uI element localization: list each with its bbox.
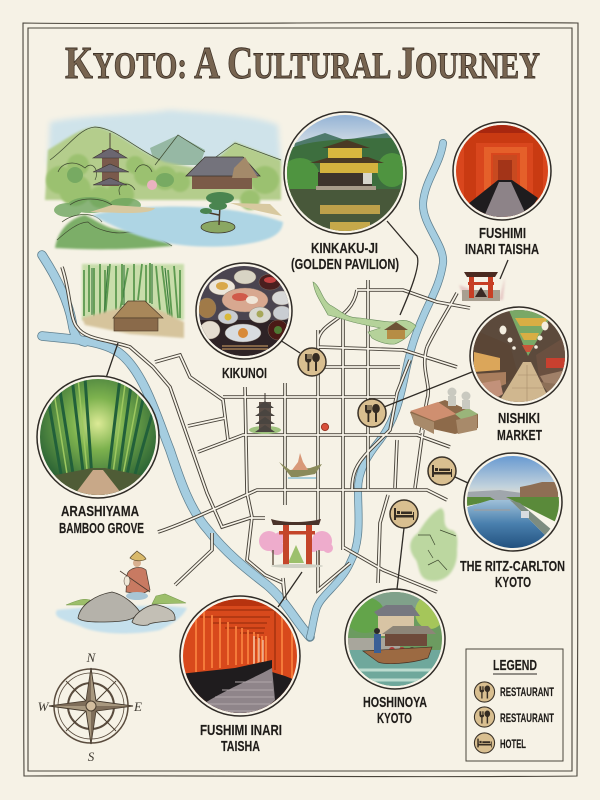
label: Fushimi Inari Taisha top: INARI TAISHA	[465, 241, 539, 258]
label: Arashiyama Bamboo Grove	[59, 503, 144, 537]
street grid	[62, 267, 470, 600]
label: Hoshinoya Kyoto: KYOTO	[377, 710, 412, 727]
legend row: hotel: HOTEL	[500, 737, 526, 751]
east river	[310, 143, 443, 637]
label: Kinkaku-ji: KINKAKU-JI	[311, 240, 378, 257]
compass rose	[38, 650, 142, 764]
label: Hoshinoya Kyoto	[363, 694, 427, 727]
marker: red city centre dot	[321, 423, 329, 431]
title: KYOTO: A CULTURAL JOURNEY	[65, 37, 540, 88]
legend heading: LEGEND	[493, 657, 537, 674]
west river	[42, 255, 310, 637]
legend panel	[466, 649, 563, 761]
legend row: restaurant: RESTAURANT	[500, 685, 554, 699]
label: Hoshinoya Kyoto: HOSHINOYA	[363, 694, 427, 711]
compass rose: S	[88, 749, 95, 764]
icon: small torii gate	[459, 272, 505, 301]
photo circle: Kikunoi	[196, 263, 292, 360]
photo circle: Hoshinoya Kyoto	[345, 589, 445, 690]
photo circle: The Ritz-Carlton Kyoto	[464, 453, 562, 552]
icon: torii gate with cherry blossoms	[259, 519, 333, 568]
icon: green hills	[410, 508, 457, 581]
illustration: bamboo grove and thatched hut	[82, 263, 184, 338]
label: Nishiki Market	[497, 410, 542, 444]
photo circle: Nishiki Market	[470, 307, 568, 405]
illustration: market stalls	[410, 388, 478, 434]
label: Fushimi Inari Taisha bottom	[200, 722, 282, 755]
label: Kinkaku-ji: (GOLDEN PAVILION)	[291, 256, 399, 273]
label: Nishiki Market: MARKET	[497, 427, 542, 444]
marker: hotel near Hoshinoya	[390, 500, 418, 528]
legend row: restaurant second: RESTAURANT	[500, 711, 554, 725]
label: Arashiyama Bamboo Grove: BAMBOO GROVE	[59, 520, 144, 537]
compass rose: E	[133, 699, 142, 714]
leader: Kikunoi	[280, 340, 300, 353]
photo circle: Fushimi Inari Taisha top	[453, 122, 551, 220]
photo circle: Arashiyama Bamboo Grove	[37, 376, 159, 498]
leader: Fushimi Inari bottom	[278, 572, 302, 607]
marker: restaurant near Nishiki	[358, 399, 386, 427]
pagoda	[93, 133, 129, 186]
photo circle: Fushimi Inari Taisha bottom	[180, 596, 300, 716]
label: Fushimi Inari Taisha top	[465, 225, 539, 258]
label: Arashiyama Bamboo Grove: ARASHIYAMA	[61, 503, 139, 520]
label: Kinkaku-ji	[291, 240, 399, 273]
compass rose: N	[86, 650, 97, 665]
leader: Hoshinoya	[397, 528, 404, 589]
illustration: Kinkaku-ji park and small pavilion	[313, 282, 416, 344]
leader: Ritz-Carlton	[455, 477, 468, 483]
label: Kikunoi: KIKUNOI	[222, 365, 267, 382]
leader: Nishiki Market	[384, 372, 472, 407]
leader: Arashiyama	[106, 343, 118, 378]
illustration: fisherman on rocks	[56, 551, 187, 633]
label: The Ritz-Carlton Kyoto	[460, 558, 565, 591]
label: Fushimi Inari Taisha bottom: TAISHA	[221, 738, 260, 755]
label: Fushimi Inari Taisha bottom: FUSHIMI INARI	[200, 722, 282, 739]
marker: restaurant near Kikunoi	[298, 348, 326, 376]
illustration: garden landscape with pagoda and temple	[45, 110, 283, 249]
temple hall	[186, 157, 260, 189]
label: Nishiki Market: NISHIKI	[498, 410, 540, 427]
label: Fushimi Inari Taisha top: FUSHIMI	[479, 225, 526, 242]
icon: boat on map	[279, 453, 322, 478]
leader: Kinkaku-ji	[387, 221, 418, 315]
river system	[42, 143, 443, 637]
photo circle: Kinkaku-ji	[280, 112, 407, 234]
icon: pagoda on map	[249, 393, 281, 434]
label: The Ritz-Carlton Kyoto: KYOTO	[495, 574, 531, 591]
marker: hotel near Ritz-Carlton	[428, 457, 456, 485]
leader: small torii	[500, 260, 508, 279]
compass rose: W	[38, 699, 50, 714]
